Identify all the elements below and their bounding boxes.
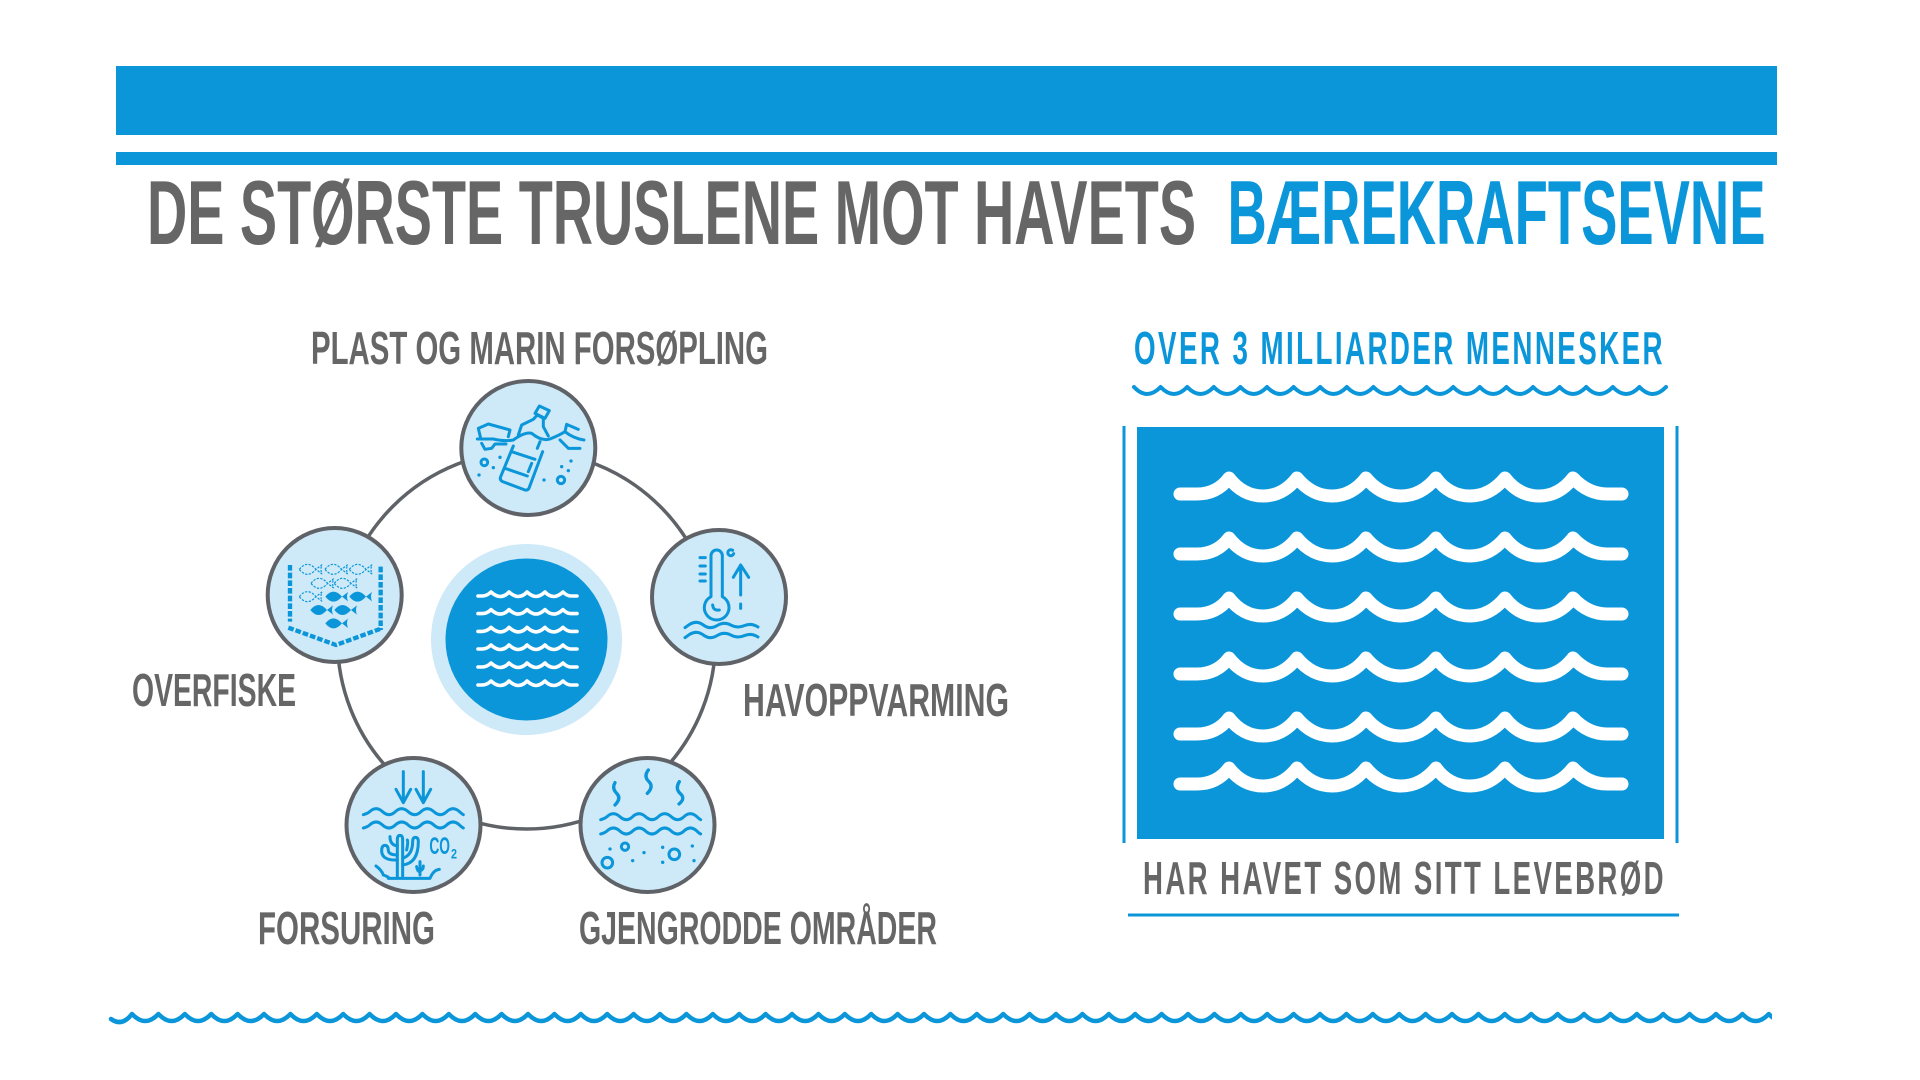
connecting ring [338,451,716,829]
icon: thermometer over water [652,530,786,664]
label: overgrown areas: GJENGRODDE OMRÅDER [579,902,937,954]
ocean block [1137,427,1664,839]
header bar [116,66,1777,135]
label: plastic: PLAST OG MARIN FORSØPLING [311,322,768,374]
label: overfishing: OVERFISKE [132,664,296,716]
icon: acidification with coral and CO2: 2 [451,846,457,862]
panel: three billion people [1122,322,1679,916]
wave divider [1134,387,1666,394]
centre ocean badge [431,544,622,735]
icon: overfishing pocket [268,528,402,662]
side rule right [1676,426,1678,843]
label: acidification: FORSURING [258,902,435,954]
icon: acidification with coral and CO2 [346,758,480,892]
title: DE STØRSTE TRUSLENE MOT HAVETS [147,163,1196,264]
icon: plastic bottle and litter [461,381,595,515]
panel: threats cycle [268,381,786,892]
icon: acidification with coral and CO2: CO [429,833,450,860]
icon: overgrown waters [580,758,714,892]
label: warming: HAVOPPVARMING [743,674,1009,726]
bottom wave divider [111,1014,1874,1022]
header thin rule [116,152,1777,165]
caption rule [1128,914,1679,916]
side rule left [1122,426,1126,843]
